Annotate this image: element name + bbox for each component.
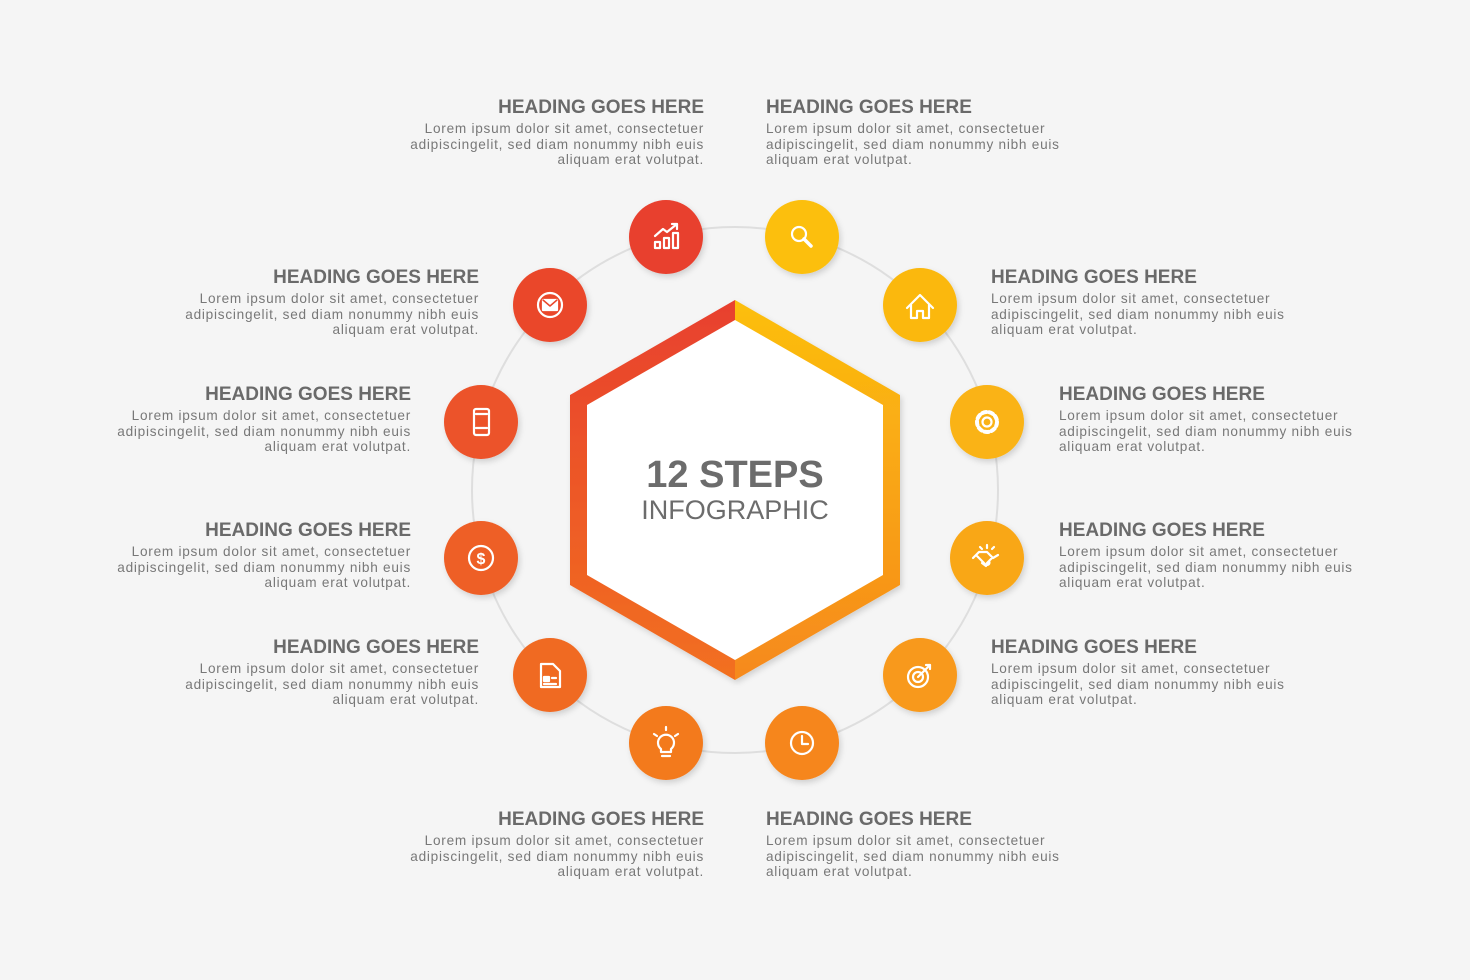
text: step 3 xyxy=(991,267,1285,337)
text: step 5: HEADING GOES HERE xyxy=(1059,520,1265,541)
text: step 11: aliquam erat volutpat. xyxy=(265,439,411,454)
icon: chart xyxy=(655,224,678,248)
text: step 8 xyxy=(410,809,704,879)
text: step 12: aliquam erat volutpat. xyxy=(333,322,479,337)
text: step 11: HEADING GOES HERE xyxy=(205,384,411,405)
text: step 4: Lorem ipsum dolor sit amet, consectetuer xyxy=(1059,408,1338,423)
icon: bulb xyxy=(654,727,678,756)
text: step 10: Lorem ipsum dolor sit amet, consectetuer xyxy=(132,544,411,559)
text: step 12 xyxy=(185,267,479,337)
text: step 3: adipiscingelit, sed diam nonummy nibh euis xyxy=(991,307,1285,322)
text: step 10 xyxy=(117,520,411,590)
text: step 10: aliquam erat volutpat. xyxy=(265,575,411,590)
icon: handshake xyxy=(973,545,998,566)
text: step 7: HEADING GOES HERE xyxy=(766,809,972,830)
text: step 10: HEADING GOES HERE xyxy=(205,520,411,541)
text: step 1: aliquam erat volutpat. xyxy=(558,152,704,167)
text: step 5: aliquam erat volutpat. xyxy=(1059,575,1205,590)
text: step 8: Lorem ipsum dolor sit amet, consectetuer xyxy=(425,833,704,848)
text: step 9: HEADING GOES HERE xyxy=(273,637,479,658)
text: step 6: adipiscingelit, sed diam nonummy nibh euis xyxy=(991,677,1285,692)
text: step 7: adipiscingelit, sed diam nonummy nibh euis xyxy=(766,849,1060,864)
text: step 1: adipiscingelit, sed diam nonummy nibh euis xyxy=(410,137,704,152)
text: step 4 xyxy=(1059,384,1353,454)
text: step 10: adipiscingelit, sed diam nonummy nibh euis xyxy=(117,560,411,575)
icon: mail xyxy=(538,293,562,317)
text: step 11: adipiscingelit, sed diam nonummy nibh euis xyxy=(117,424,411,439)
text: step 6: Lorem ipsum dolor sit amet, consectetuer xyxy=(991,661,1270,676)
icon: search xyxy=(792,227,811,246)
text: step 9: adipiscingelit, sed diam nonummy nibh euis xyxy=(185,677,479,692)
icon: document xyxy=(541,664,560,687)
title: 12 STEPS xyxy=(646,454,824,496)
text: step 8: aliquam erat volutpat. xyxy=(558,864,704,879)
text: step 2: HEADING GOES HERE xyxy=(766,97,972,118)
text: step 11: Lorem ipsum dolor sit amet, consectetuer xyxy=(132,408,411,423)
text: step 4: adipiscingelit, sed diam nonummy nibh euis xyxy=(1059,424,1353,439)
text: step 6: HEADING GOES HERE xyxy=(991,637,1197,658)
text: step 5: adipiscingelit, sed diam nonummy nibh euis xyxy=(1059,560,1353,575)
icon: target xyxy=(908,665,930,687)
text: step 1 xyxy=(410,97,704,167)
text: step 2 xyxy=(766,97,1060,167)
icon: gear xyxy=(977,412,997,432)
text: step 7: Lorem ipsum dolor sit amet, consectetuer xyxy=(766,833,1045,848)
text: step 12: Lorem ipsum dolor sit amet, consectetuer xyxy=(200,291,479,306)
text: step 6 xyxy=(991,637,1285,707)
text: step 3: aliquam erat volutpat. xyxy=(991,322,1137,337)
text: step 3: HEADING GOES HERE xyxy=(991,267,1197,288)
text: step 5: Lorem ipsum dolor sit amet, consectetuer xyxy=(1059,544,1338,559)
text: step 7 xyxy=(766,809,1060,879)
central hexagon xyxy=(570,300,900,680)
icon: phone xyxy=(474,409,489,435)
icon: clock xyxy=(791,732,813,754)
icon: home xyxy=(907,295,933,318)
text: step 8: HEADING GOES HERE xyxy=(498,809,704,830)
text: step 6: aliquam erat volutpat. xyxy=(991,692,1137,707)
title xyxy=(641,454,829,525)
text: step 2: aliquam erat volutpat. xyxy=(766,152,912,167)
text: step 3: Lorem ipsum dolor sit amet, consectetuer xyxy=(991,291,1270,306)
text: step 12: HEADING GOES HERE xyxy=(273,267,479,288)
text: step 5 xyxy=(1059,520,1353,590)
text: step 4: aliquam erat volutpat. xyxy=(1059,439,1205,454)
text: step 8: adipiscingelit, sed diam nonummy nibh euis xyxy=(410,849,704,864)
text: step 9 xyxy=(185,637,479,707)
icon: dollar: $ xyxy=(477,551,486,568)
text: step 2: Lorem ipsum dolor sit amet, consectetuer xyxy=(766,121,1045,136)
text: step 1: Lorem ipsum dolor sit amet, consectetuer xyxy=(425,121,704,136)
text: step 2: adipiscingelit, sed diam nonummy nibh euis xyxy=(766,137,1060,152)
icon: dollar xyxy=(469,546,493,570)
text: step 11 xyxy=(117,384,411,454)
text: step 7: aliquam erat volutpat. xyxy=(766,864,912,879)
text: step 9: aliquam erat volutpat. xyxy=(333,692,479,707)
title: INFOGRAPHIC xyxy=(641,495,829,525)
text: step 1: HEADING GOES HERE xyxy=(498,97,704,118)
text: step 9: Lorem ipsum dolor sit amet, consectetuer xyxy=(200,661,479,676)
ring line xyxy=(472,227,998,753)
text: step 12: adipiscingelit, sed diam nonummy nibh euis xyxy=(185,307,479,322)
text: step 4: HEADING GOES HERE xyxy=(1059,384,1265,405)
